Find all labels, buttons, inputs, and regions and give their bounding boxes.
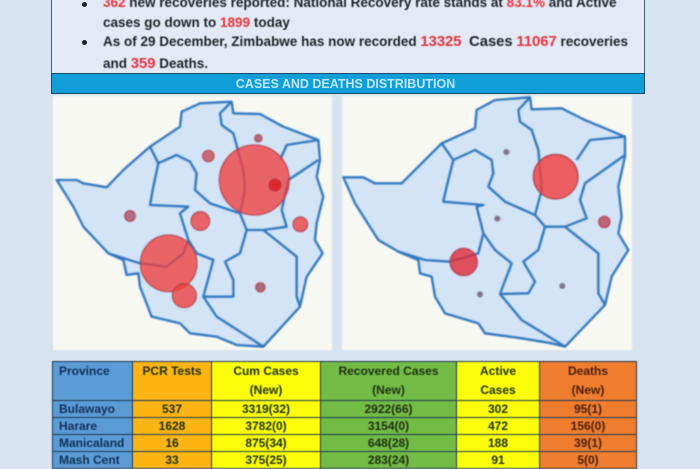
row: Mash Cent: 91	[491, 453, 505, 467]
row: Bulawayo: Bulawayo	[59, 402, 115, 416]
text panel: summary	[51, 0, 645, 73]
row: Mash Cent: Mash Cent	[59, 453, 120, 467]
row: Bulawayo: 2922(66)	[364, 402, 413, 416]
row: Harare: Harare	[59, 419, 97, 433]
table header	[52, 361, 637, 469]
text: recoveries line 2: cases go down to 1899 today	[103, 15, 290, 30]
row: Manicaland: 188	[488, 436, 508, 450]
text: totals line 1: As of 29 December, Zimbabwe has now recorded 13325 Cases 11067 recoveries	[103, 34, 628, 50]
row: Bulawayo	[52, 400, 637, 418]
table header: Cum Cases	[233, 364, 299, 378]
row: Mash Cent: 5(0)	[577, 453, 599, 467]
row: Bulawayo: 3319(32)	[242, 402, 290, 416]
row: Harare: 472	[488, 419, 508, 433]
row: Bulawayo: 537	[162, 402, 182, 416]
table header: (New)	[572, 383, 604, 397]
bullet: totals	[82, 40, 87, 45]
text: totals line 2: and 359 Deaths.	[103, 56, 208, 72]
panel: right map	[341, 95, 632, 350]
row: Mash Cent: 375(25)	[245, 453, 287, 467]
row: Harare: 156(0)	[571, 419, 605, 433]
row: Manicaland: 16	[165, 436, 179, 450]
banner: cases and deaths distribution	[51, 73, 645, 94]
table header: (New)	[372, 383, 405, 397]
banner: cases and deaths distribution: CASES AND DEATHS DISTRIBUTION	[236, 77, 455, 91]
row: Bulawayo: 302	[488, 402, 508, 416]
row: Manicaland: 875(34)	[245, 436, 287, 450]
map: deaths by province	[343, 97, 628, 347]
bullet: recoveries	[82, 2, 87, 7]
row: Manicaland	[52, 434, 637, 452]
table: province statistics	[51, 360, 638, 469]
table header: Deaths	[568, 364, 608, 378]
table header: Active	[480, 364, 516, 378]
row: Manicaland: 648(28)	[368, 436, 409, 450]
table header: PCR Tests	[142, 364, 202, 378]
map: cases by province	[57, 102, 323, 347]
row: Mash Cent	[52, 451, 637, 469]
table header: Province	[59, 364, 110, 378]
row: Mash Cent: 283(24)	[368, 453, 409, 467]
row: Harare: 1628	[159, 419, 185, 433]
row: Bulawayo: 95(1)	[574, 402, 602, 416]
row: Manicaland: Manicaland	[59, 436, 124, 450]
bubbles: deaths	[450, 149, 610, 297]
table header: (New)	[250, 383, 282, 397]
row: Harare	[52, 417, 637, 435]
row: Harare: 3154(0)	[368, 419, 409, 433]
row: Harare: 3782(0)	[245, 419, 287, 433]
row: Manicaland: 39(1)	[574, 436, 602, 450]
table header: Cases	[480, 383, 516, 397]
bubbles: cases	[125, 135, 308, 308]
table header: Recovered Cases	[338, 364, 439, 378]
panel: left map	[52, 96, 332, 350]
row: Mash Cent: 33	[165, 453, 179, 467]
